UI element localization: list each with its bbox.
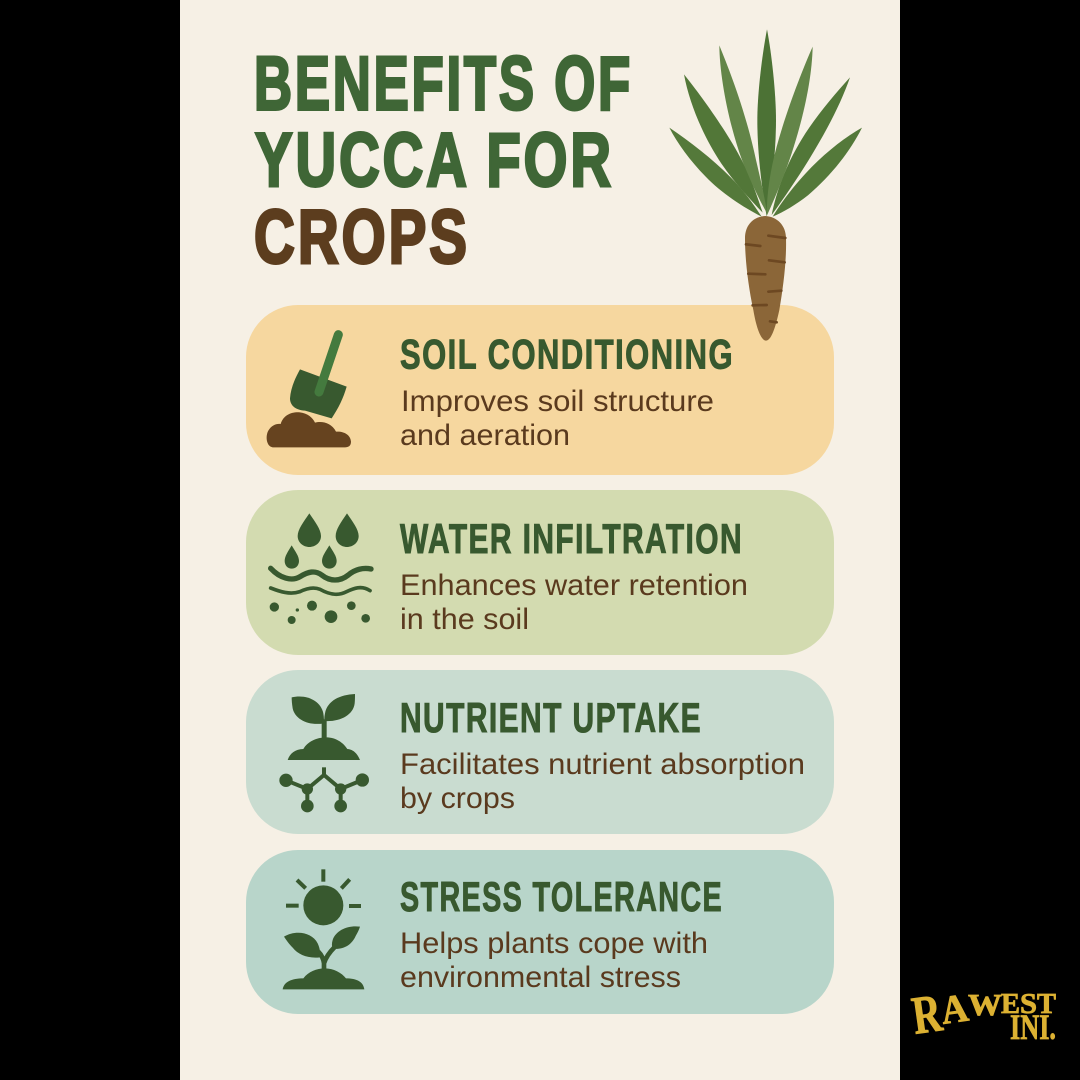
title [254, 42, 633, 280]
logo: Rawest Inc: E [1001, 989, 1020, 1020]
description: nutrient uptake: Facilitates nutrient absorption [400, 748, 805, 781]
logo: Rawest Inc: W [968, 987, 1002, 1022]
description: water infiltration: Enhances water retention [400, 569, 748, 602]
poster background [180, 0, 900, 1080]
description: water infiltration: in the soil [400, 603, 529, 636]
icon: shovel and soil [267, 335, 351, 447]
logo: Rawest Inc: T [1037, 989, 1056, 1020]
heading: water infiltration: WATER INFILTRATION [400, 515, 743, 562]
panel: stress tolerance [246, 850, 834, 1014]
heading: stress tolerance: STRESS TOLERANCE [400, 873, 723, 920]
description: nutrient uptake [400, 748, 805, 815]
icon: water drops, waves and soil particles [270, 513, 371, 624]
description: nutrient uptake: by crops [400, 782, 515, 815]
description: stress tolerance: environmental stress [400, 961, 681, 994]
icon: sprout and nutrient molecule [279, 694, 369, 812]
description: soil conditioning [400, 385, 714, 452]
logo: Rawest Inc: S [1020, 989, 1037, 1020]
panel: soil conditioning [246, 305, 834, 475]
heading: soil conditioning: SOIL CONDITIONING [400, 330, 734, 378]
panel: nutrient uptake [246, 670, 834, 834]
icon: sun and plant [283, 869, 364, 989]
title: CROPS [254, 195, 470, 280]
logo: Rawest Inc: R [908, 982, 946, 1046]
description: stress tolerance: Helps plants cope with [400, 927, 708, 960]
panel: water infiltration [246, 490, 834, 655]
illustration: yucca plant with root [669, 29, 862, 341]
description: soil conditioning: Improves soil structure [401, 385, 714, 418]
description: stress tolerance [400, 927, 708, 994]
logo: Rawest Inc: INI. [1010, 1007, 1056, 1047]
title: BENEFITS OF [254, 42, 633, 126]
heading: nutrient uptake: NUTRIENT UPTAKE [400, 694, 702, 741]
logo: Rawest Inc: A [938, 985, 971, 1033]
description: soil conditioning: and aeration [400, 419, 570, 452]
title: YUCCA FOR [255, 118, 614, 203]
logo: Rawest Inc [908, 982, 1056, 1047]
description: water infiltration [400, 569, 748, 636]
